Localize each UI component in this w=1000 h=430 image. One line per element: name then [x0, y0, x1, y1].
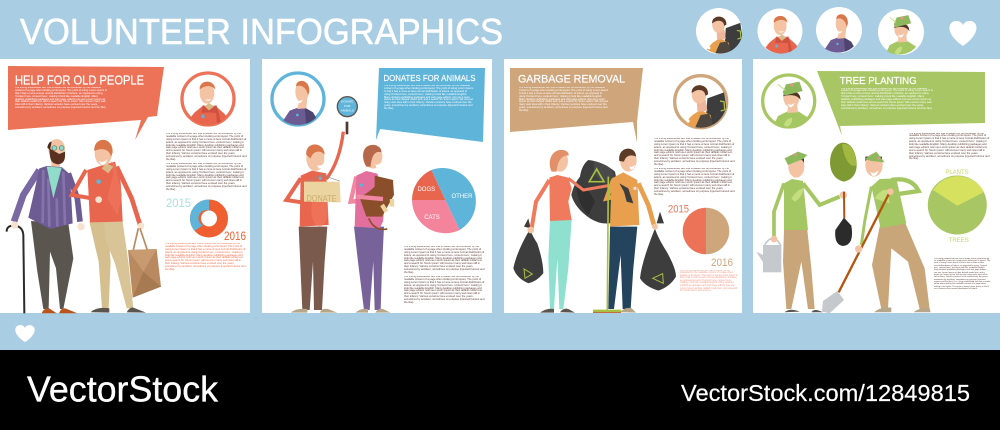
- icon: heart top: [950, 21, 976, 46]
- watermark logo text: VectorStock: [27, 368, 219, 410]
- pie chart: [412, 168, 476, 233]
- speech bubble: donates for animals: [376, 68, 485, 142]
- sign caption: [341, 100, 354, 112]
- pie labels: [417, 187, 473, 221]
- figures: old man and volunteer: [7, 139, 161, 313]
- label 2015: 2015: [166, 198, 191, 210]
- avatar: volunteer with cap: [763, 75, 815, 129]
- label 2016: 2016: [224, 231, 246, 243]
- panel: donates for animals: [262, 59, 492, 313]
- speech bubble: help for old people: [8, 66, 164, 140]
- heading: tree planting: TREE PLANTING: [840, 76, 917, 87]
- speech bubble: garbage removal: [510, 68, 643, 143]
- panel: tree planting: [753, 59, 1000, 313]
- panel: garbage removal: [504, 59, 742, 313]
- sign caption: FOR: [344, 104, 351, 108]
- label 2015: 2015: [668, 204, 689, 216]
- heading: help for old people: HELP FOR OLD PEOPLE: [15, 72, 144, 88]
- pie labels: OTHER: [452, 194, 473, 200]
- pie chart half and half: [683, 208, 729, 254]
- small paragraphs: It is a long established fact that a reader will be distracted by the readable content of a page when looking at its layout. The point of using Lorem Ipsum is that it has a more-or-less normal distribution of letters, as opposed to using 'Content here, content here', making it look like readable English. Many desktop publishing packages and web page editors now use Lorem Ipsum as their default model text, and a search for 'lorem ipsum' will uncover many web sites still in their infancy. Various versions have evolved over the years, sometimes by accident, sometimes on purpose (injected humour and the like). It is a long established fact that a reader will be distracted by the readable content of a page when looking at its layout. The point of using Lorem Ipsum is that it has a more-or-less normal distribution of letters.: [934, 258, 990, 290]
- heading: donates for animals: DONATES FOR ANIMALS: [384, 73, 476, 83]
- label trees: TREES: [949, 238, 969, 244]
- figures: two volunteers with garbage bags: [513, 149, 676, 313]
- figures: two volunteers planting a tree: [756, 143, 931, 313]
- avatar: volunteer in purple: [272, 73, 324, 127]
- watermark band: [0, 350, 1000, 430]
- pie chart: [928, 176, 987, 234]
- avatar: volunteer with bag: [675, 76, 727, 130]
- sign caption: DONATE: [341, 100, 353, 104]
- avatar: volunteer in red: [182, 73, 234, 126]
- figures: volunteers with donate sign and dog: [286, 97, 394, 313]
- donut chart: [190, 200, 222, 232]
- pie labels: CATS: [424, 215, 440, 221]
- avatar row: team portraits: [696, 7, 924, 57]
- label 2016: 2016: [711, 257, 733, 269]
- panel: help for old people: [0, 59, 250, 313]
- watermark url: VectorStock.com/12849815: [681, 380, 970, 406]
- speech bubble: tree planting: [817, 71, 985, 136]
- title: VOLUNTEER INFOGRAPHICS: [20, 11, 503, 52]
- icon: heart bottom: [15, 325, 35, 342]
- label plants: PLANTS: [945, 170, 969, 176]
- donate board label: DONATE: [306, 194, 336, 204]
- sign caption: ANIMALS: [341, 108, 354, 112]
- heading: garbage removal: GARBAGE REMOVAL: [518, 74, 625, 86]
- pie labels: DOGS: [417, 187, 435, 193]
